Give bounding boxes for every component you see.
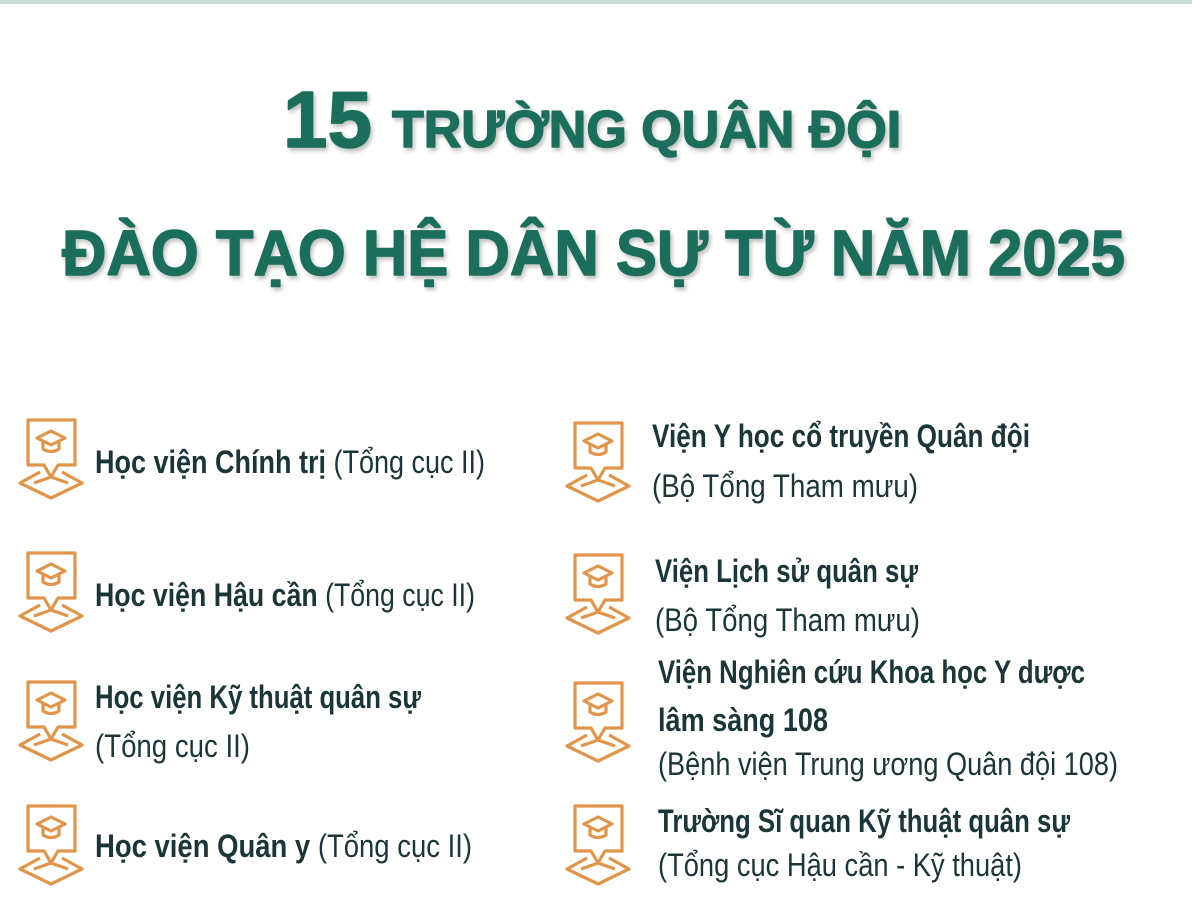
item: Học viện Kỹ thuật quân sự: Học viện Kỹ thuật quân sự — [95, 679, 422, 715]
item: Học viện Hậu cần — [20, 553, 475, 631]
title: 15 TRƯỜNG QUÂN ĐỘI — [283, 75, 901, 164]
item: Trường Sĩ quan Kỹ thuật quân sự: (Tổng cục Hậu cần - Kỹ thuật) — [658, 847, 1022, 883]
item: Viện Nghiên cứu Khoa học Y dược lâm sàng 108: lâm sàng 108 — [658, 702, 828, 738]
item: Học viện Quân y — [20, 806, 472, 884]
item: Viện Y học cổ truyền: (Bộ Tổng Tham mưu) — [652, 468, 918, 504]
item: Viện Lịch sử quân sự: (Bộ Tổng Tham mưu) — [655, 602, 920, 638]
item: Viện Nghiên cứu Khoa học Y dược lâm sàng 108: Viện Nghiên cứu Khoa học Y dược — [658, 654, 1085, 690]
item: Học viện Hậu cần: Học viện Hậu cần (Tổng cục II) — [95, 577, 475, 613]
title — [62, 75, 1125, 289]
item: Viện Lịch sử quân sự: Viện Lịch sử quân sự — [655, 553, 919, 589]
title: ĐÀO TẠO HỆ DÂN SỰ TỪ NĂM 2025 — [62, 216, 1125, 289]
item: Học viện Kỹ thuật quân sự: (Tổng cục II) — [95, 728, 250, 764]
item: Học viện Chính trị: Học viện Chính trị (Tổng cục II) — [95, 444, 485, 480]
item: Học viện Kỹ thuật quân sự — [20, 679, 422, 764]
item: Viện Nghiên cứu Khoa học Y dược lâm sàng 108 — [567, 654, 1118, 782]
item: Trường Sĩ quan Kỹ thuật quân sự — [567, 803, 1071, 884]
item: Viện Y học cổ truyền: Viện Y học cổ truyền Quân đội — [652, 418, 1030, 454]
item: Học viện Quân y: Học viện Quân y (Tổng cục II) — [95, 828, 472, 864]
item: Học viện Chính trị — [20, 420, 485, 498]
item: Viện Y học cổ truyền — [567, 418, 1030, 504]
item: Viện Lịch sử quân sự — [567, 553, 920, 638]
item: Trường Sĩ quan Kỹ thuật quân sự: Trường Sĩ quan Kỹ thuật quân sự — [658, 803, 1071, 839]
item: Viện Nghiên cứu Khoa học Y dược lâm sàng 108: (Bệnh viện Trung ương Quân đội 108) — [658, 746, 1118, 782]
